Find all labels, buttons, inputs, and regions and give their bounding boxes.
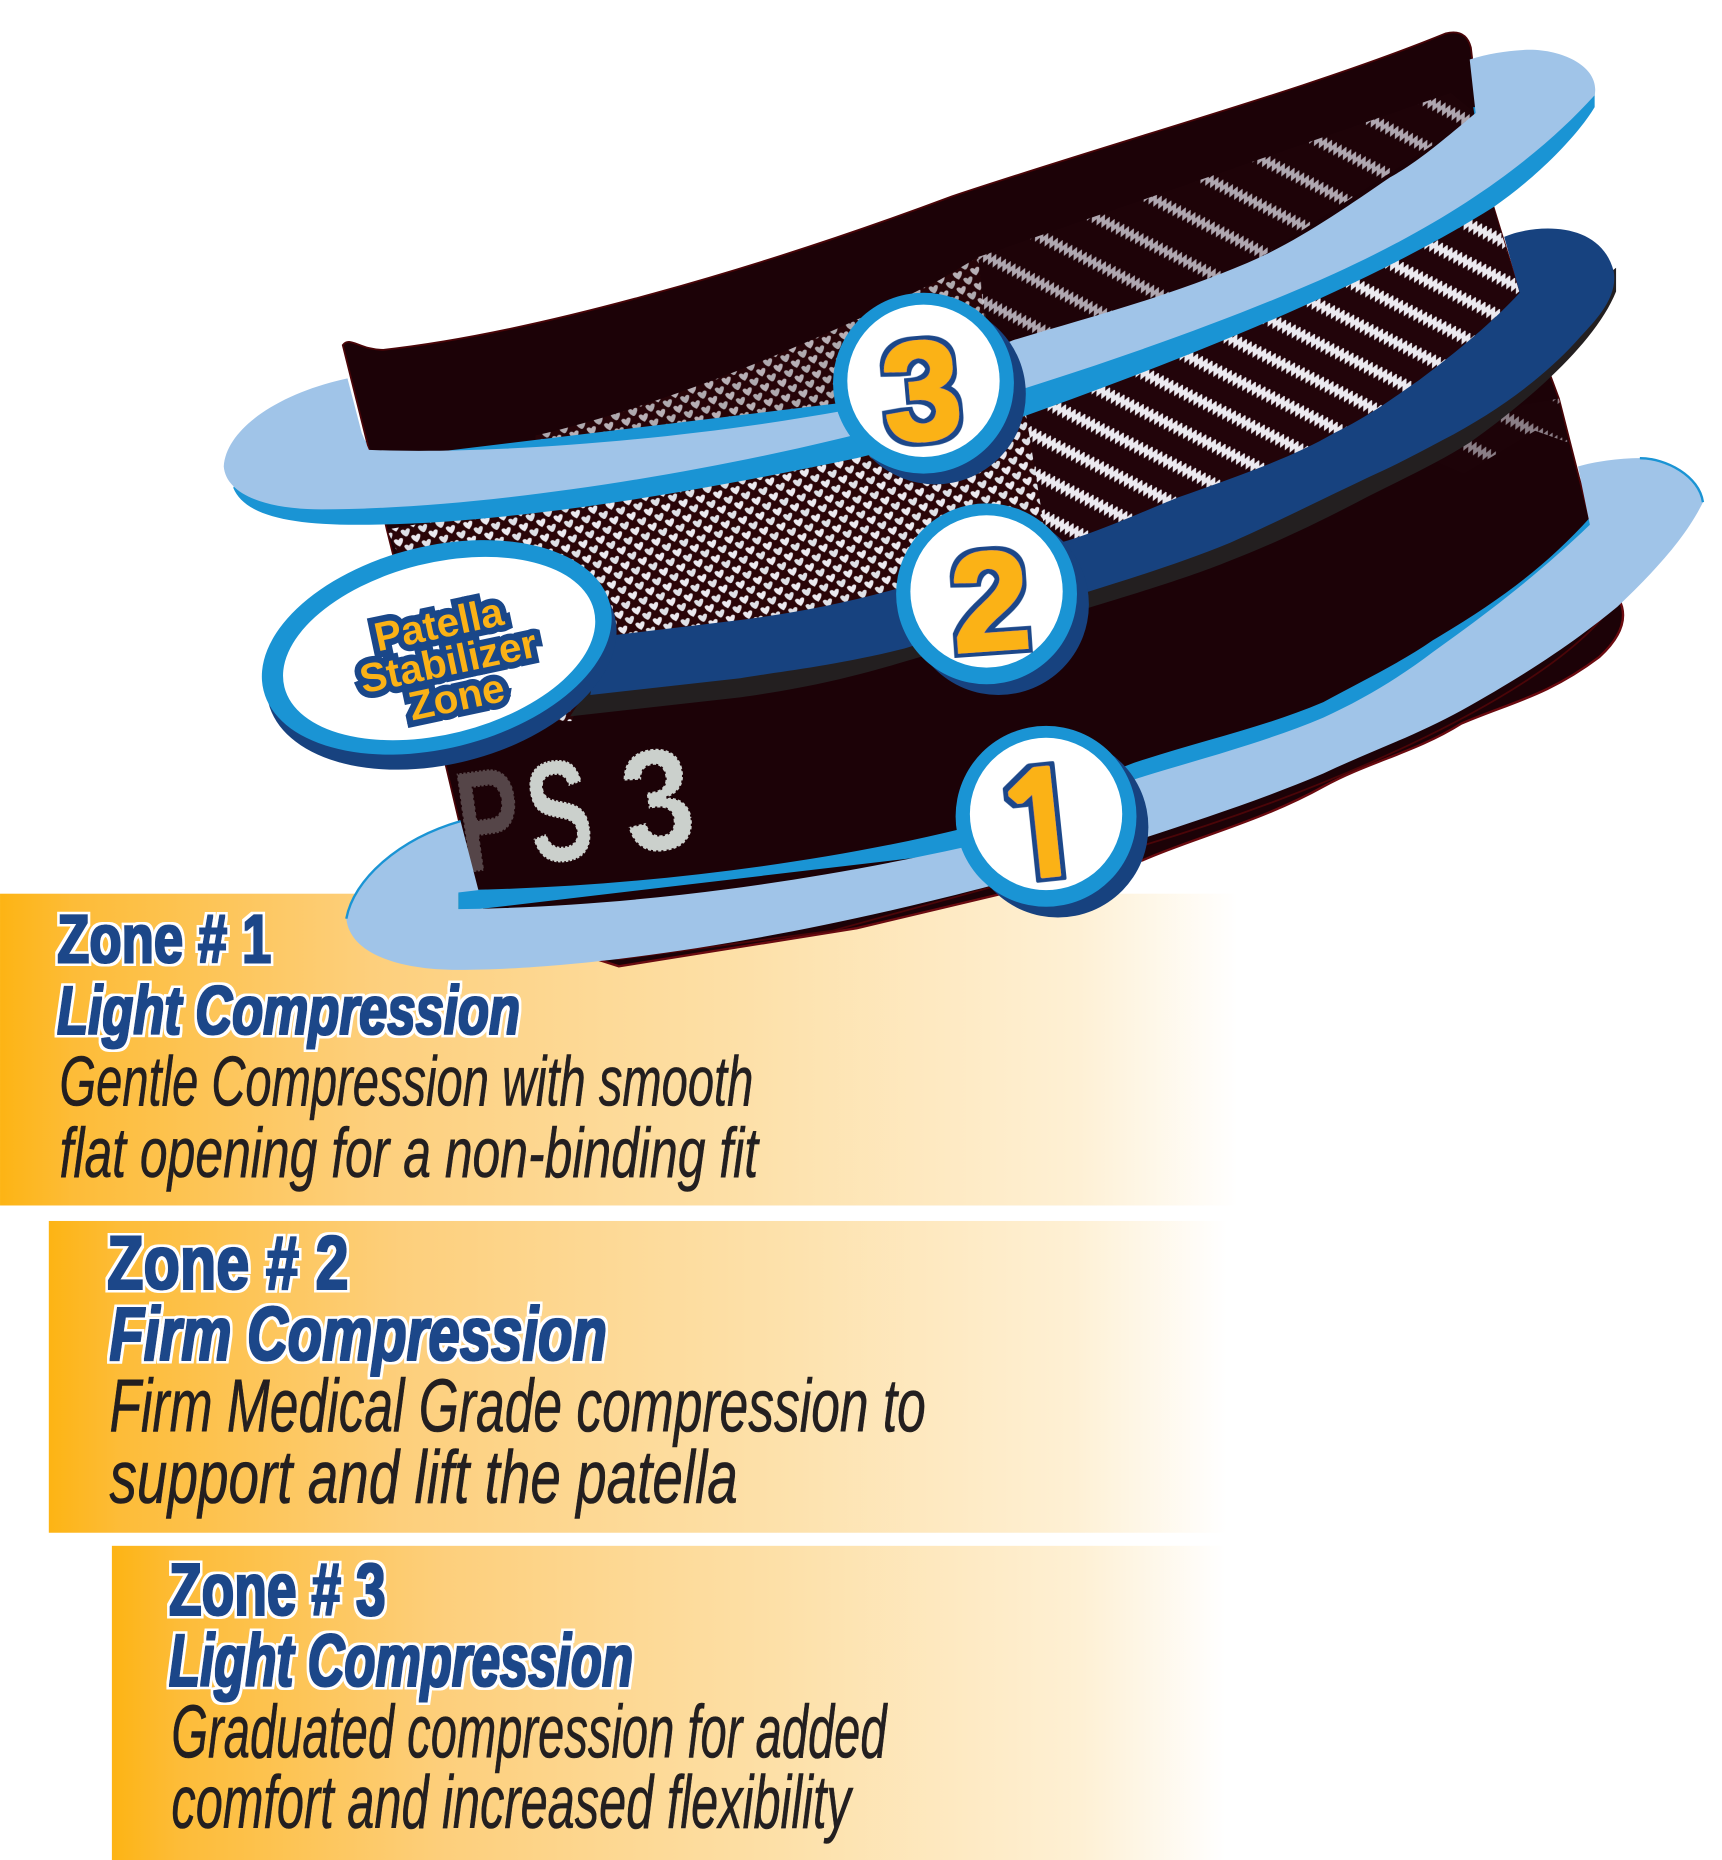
badge 1 numeral: 1 <box>985 752 1099 902</box>
ring 1 face <box>346 458 1703 970</box>
text block: zone 3 <box>169 1548 888 1844</box>
badge 3 rim <box>833 293 1014 474</box>
subheading zone 2: Firm Compression <box>110 1292 607 1377</box>
ring 2 face <box>590 228 1614 695</box>
ring: zone 2 <box>570 228 1616 716</box>
bubble text <box>355 588 541 729</box>
description zone 1 line 2: flat opening for a non-binding fit <box>60 1113 760 1192</box>
label line 1: Patella <box>370 588 508 660</box>
sleeve body <box>343 32 1607 959</box>
subheading zone 1: Light Compression <box>57 972 520 1049</box>
text block: zone 1 <box>57 901 760 1192</box>
ring 3 inner tip right <box>1473 107 1488 123</box>
heading zone 2: Zone # 2 <box>107 1221 349 1306</box>
badge 1 shadow <box>968 737 1148 918</box>
badge 2 numeral: 2 <box>946 520 1035 682</box>
badge 3 shadow <box>845 303 1026 484</box>
knit lettering <box>446 714 704 905</box>
heading zone 3: Zone # 3 <box>169 1548 386 1631</box>
badge 1 rim <box>956 726 1136 907</box>
panel: zone 1 band <box>0 894 1238 1205</box>
description zone 2 line 2: support and lift the patella <box>110 1435 738 1519</box>
label line 2: Stabilizer <box>355 620 541 702</box>
badge: number 3 <box>833 293 1026 484</box>
badge 2 rim <box>896 503 1077 684</box>
badge 1 inner <box>970 738 1122 890</box>
description zone 2 line 1: Firm Medical Grade compression to <box>110 1364 926 1448</box>
band background 1 <box>0 894 1238 1205</box>
panel: zone 2 band <box>49 1221 1227 1533</box>
band background 2 <box>49 1221 1227 1533</box>
ring 2 shadow <box>570 268 1616 716</box>
bubble shadow <box>243 514 640 804</box>
subheading zone 3: Light Compression <box>169 1619 633 1702</box>
ring 1 outer tip edges <box>346 458 1703 919</box>
badge: number 1 <box>956 726 1148 918</box>
knit: upper dots <box>536 257 988 455</box>
badge 2 inner <box>910 515 1063 668</box>
panel: zone 3 band <box>112 1546 1226 1860</box>
knit: lower right dots <box>1428 399 1568 474</box>
knit letter 3: 3 <box>611 714 704 885</box>
knit letter S: S <box>516 728 602 897</box>
badge 3 numeral: 3 <box>876 309 967 472</box>
knit letter P: P <box>446 736 532 905</box>
text block: zone 2 <box>107 1221 926 1519</box>
badge: number 2 <box>896 503 1089 695</box>
band background 3 <box>112 1546 1226 1860</box>
bubble inner <box>264 527 615 770</box>
ring 1 inner edge <box>458 518 1595 912</box>
ring 3 edge <box>233 89 1595 525</box>
description zone 3 line 2: comfort and increased flexibility <box>171 1760 854 1844</box>
knit: centre dots <box>387 399 1059 721</box>
description zone 1 line 1: Gentle Compression with smooth <box>60 1042 753 1121</box>
callout: patella stabilizer zone <box>239 506 640 804</box>
badge 2 shadow <box>908 514 1089 695</box>
knit: right stripes <box>1023 207 1520 583</box>
label line 3: Zone <box>404 664 509 729</box>
ring: zone 3 <box>224 50 1595 525</box>
ring: zone 1 <box>346 458 1703 970</box>
ring 3 inner tip left <box>333 431 367 443</box>
ring 3 face <box>224 50 1595 509</box>
heading zone 1: Zone # 1 <box>57 901 271 978</box>
knit: upper stripes <box>978 93 1478 357</box>
sleeve lower rim <box>500 476 1623 966</box>
bubble rim <box>239 506 634 789</box>
badge 3 inner <box>847 305 1000 457</box>
description zone 3 line 1: Graduated compression for added <box>171 1690 888 1774</box>
image: knee sleeve <box>343 32 1623 966</box>
